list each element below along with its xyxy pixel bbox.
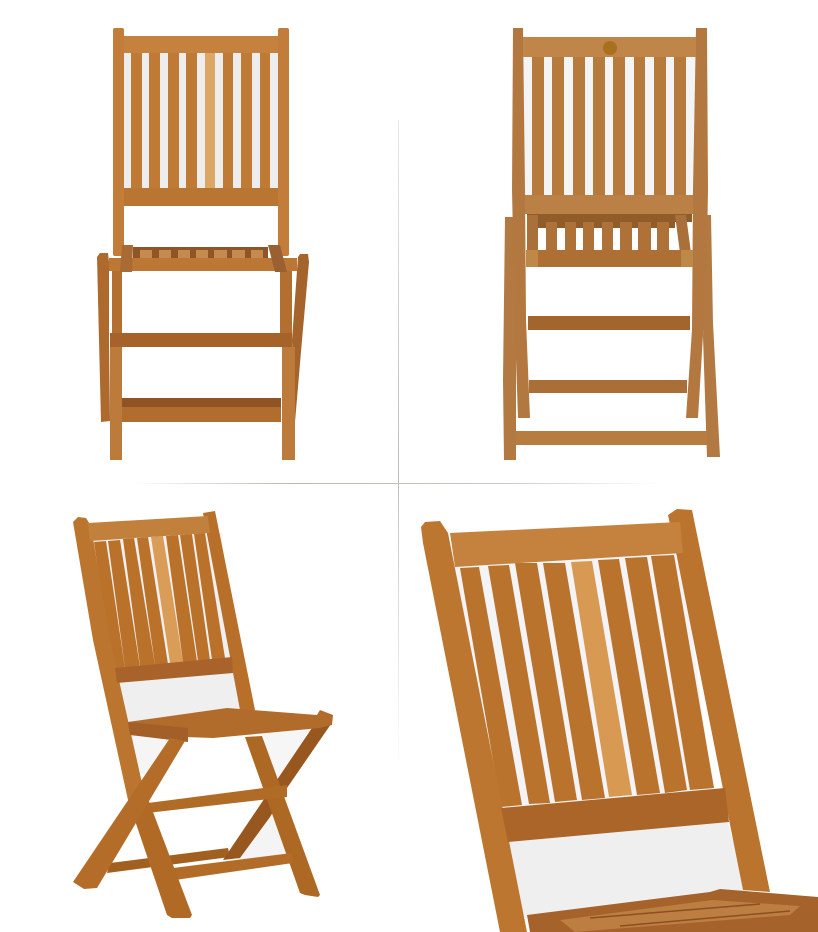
seat slat lines — [590, 904, 790, 926]
chair: close-up of backrest — [421, 509, 818, 932]
chair: rear view — [503, 28, 720, 460]
chair: three-quarter view — [73, 511, 333, 918]
icon: brand medallion — [603, 41, 617, 55]
chair: front view — [97, 28, 309, 460]
